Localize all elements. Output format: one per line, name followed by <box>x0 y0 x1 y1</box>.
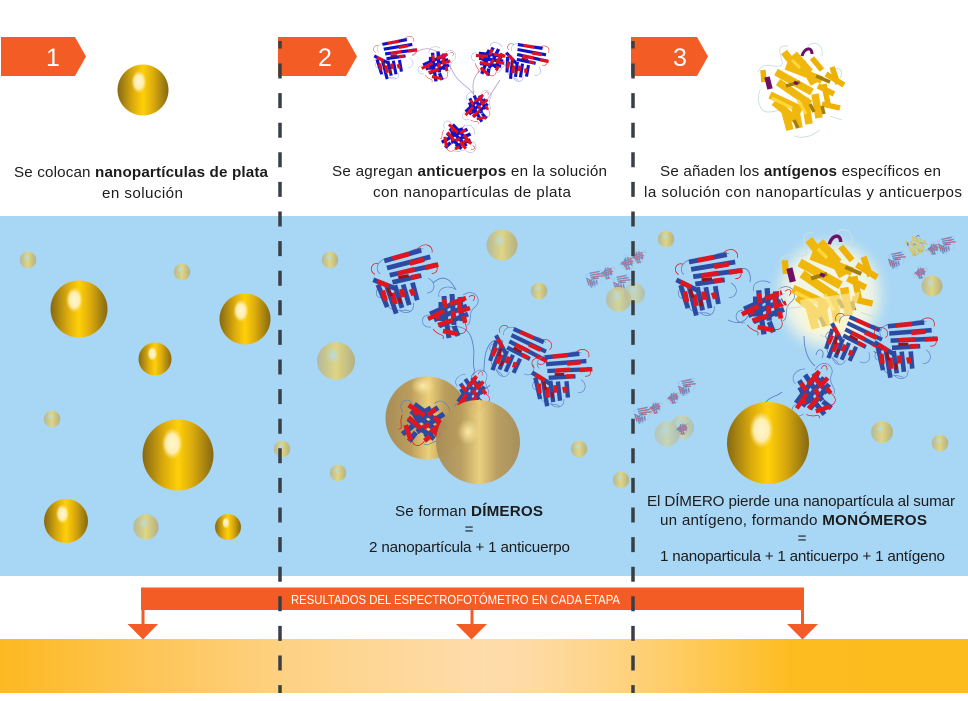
bound antibody <box>675 230 940 429</box>
text: dimers result: 2 nanopartícula + 1 anticuerpo <box>369 539 570 556</box>
step 1 tag <box>1 37 86 76</box>
text: step 3 description: Se añaden los antígenos específicos en <box>660 163 941 180</box>
antigen glow <box>780 243 880 347</box>
step 3 tag <box>631 37 708 76</box>
absorbance colour band <box>0 639 968 693</box>
panel: dimers <box>317 230 646 488</box>
step 1 tag: 1 <box>46 44 60 72</box>
small antigen and antibody cluster <box>888 234 956 279</box>
text: dimers result <box>369 503 570 556</box>
panel: monomers <box>634 230 956 484</box>
divider: step 2 to 3 <box>631 41 635 693</box>
dimer sphere front <box>436 400 520 484</box>
text: step 2 description: con nanopartículas de plata <box>373 184 572 201</box>
divider: step 1 to 2 <box>278 41 282 693</box>
results banner with arrows <box>128 588 818 640</box>
icon: antigen <box>758 43 844 137</box>
text: step 1 description: Se colocan nanopartículas de plata <box>14 164 269 181</box>
text: monomers result: un antígeno, formando MONÓMEROS <box>660 511 927 529</box>
text: step 3 description: la solución con nanopartículas y anticuerpos <box>644 184 962 201</box>
dimer sphere back <box>386 376 468 460</box>
panel: nanoparticles in solution <box>20 252 290 543</box>
text: step 2 description: Se agregan anticuerpos en la solución <box>332 163 607 180</box>
text: monomers result: El DÍMERO pierde una nanopartícula al sumar <box>647 493 955 510</box>
text: dimers result: Se forman DÍMEROS <box>395 503 543 520</box>
step 3 tag: 3 <box>673 44 687 72</box>
text: step 1 description <box>14 164 269 202</box>
text: monomers result: 1 nanoparticula + 1 anticuerpo + 1 antígeno <box>660 548 945 565</box>
step 2 tag: 2 <box>318 44 332 72</box>
monomer sphere <box>727 402 809 484</box>
icon: silver nanoparticle <box>118 64 168 116</box>
small antibody cluster <box>586 249 646 292</box>
text: step 3 description <box>644 163 962 201</box>
small antibody cluster lower <box>634 378 696 446</box>
text: step 2 description <box>332 163 607 201</box>
text: monomers result <box>647 493 955 565</box>
text: step 1 description: en solución <box>102 185 183 202</box>
text: monomers result: = <box>798 530 807 547</box>
text: dimers result: = <box>465 521 474 538</box>
step 2 tag <box>278 37 357 76</box>
antibody links <box>433 278 503 395</box>
results banner with arrows: RESULTADOS DEL ESPECTROFOTÓMETRO EN CADA ETAPA <box>291 592 621 607</box>
background panel: solution <box>0 216 968 576</box>
icon: antibody <box>374 34 553 161</box>
